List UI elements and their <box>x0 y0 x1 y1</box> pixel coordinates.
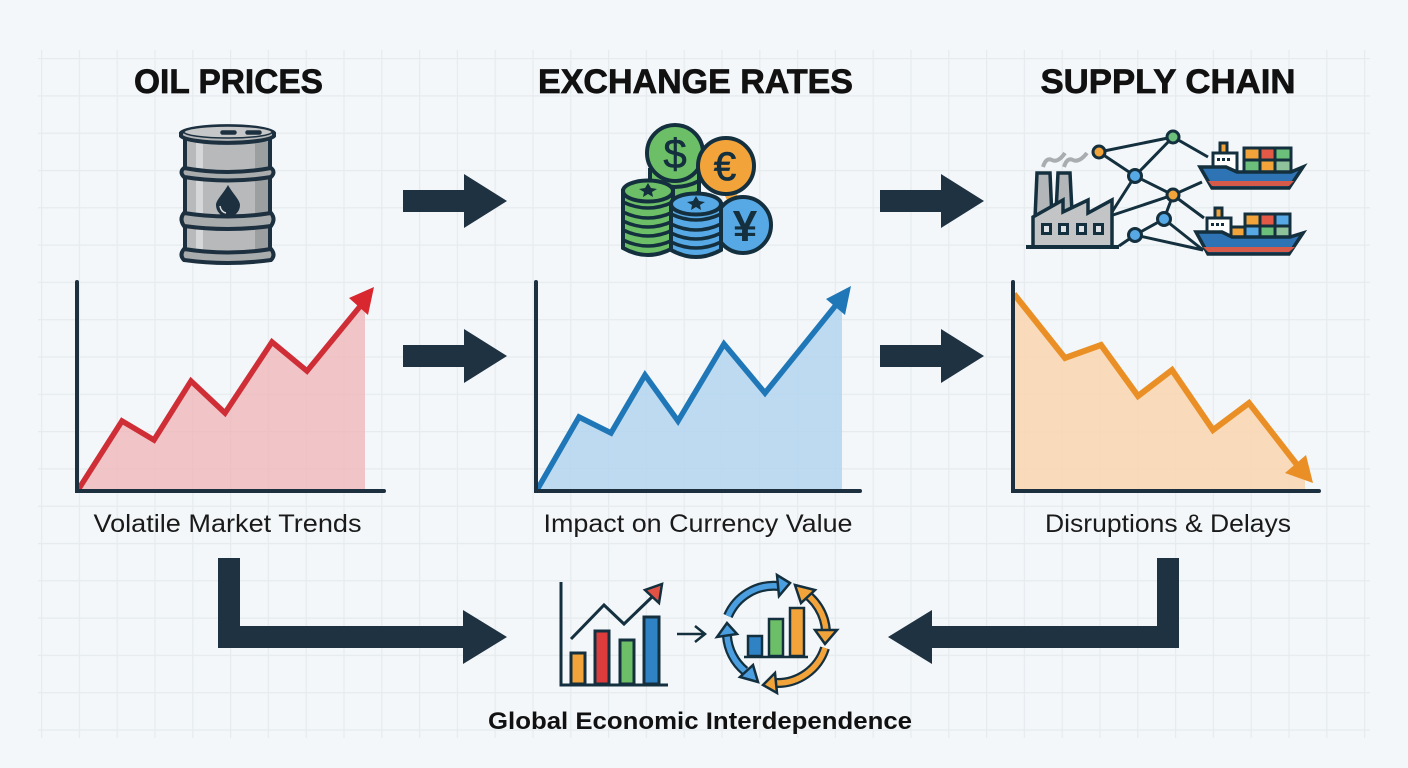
green stack <box>623 180 673 255</box>
icon: currency coins <box>623 125 771 257</box>
caption: volatile market trends: Volatile Market Trends <box>94 510 362 538</box>
blue stack <box>671 194 721 257</box>
network nodes <box>1093 131 1179 242</box>
icon: bar chart with trend <box>561 582 668 685</box>
caption: impact on currency value: Impact on Currency Value <box>544 510 852 538</box>
yen coin <box>715 197 771 253</box>
arc fills <box>727 586 826 683</box>
network links <box>1099 137 1208 250</box>
dollar coin <box>647 125 703 198</box>
euro coin: € <box>714 145 736 189</box>
icon: small arrow <box>677 626 705 642</box>
arc outlines <box>727 586 826 683</box>
arrow: exchange to supply, top <box>880 174 984 228</box>
yen coin: ¥ <box>733 202 758 251</box>
arrow: oil to global <box>218 558 507 664</box>
icon: oil barrel <box>181 126 274 263</box>
euro coin <box>698 138 754 210</box>
title: exchange rates: EXCHANGE RATES <box>538 63 853 101</box>
arrow: supply chain to global <box>888 558 1179 664</box>
dollar coin: $ <box>663 130 687 177</box>
inner bars <box>748 636 762 656</box>
smoke <box>1043 153 1087 167</box>
chart: exchange rate line <box>536 282 860 491</box>
title: oil prices: OIL PRICES <box>134 63 323 101</box>
chart: supply chain line <box>1013 282 1319 491</box>
factory <box>1026 173 1119 247</box>
arrow: exchange to supply, middle <box>880 329 984 383</box>
title: supply chain: SUPPLY CHAIN <box>1040 63 1296 101</box>
arrow heads <box>777 575 790 596</box>
chart: oil price line <box>77 282 384 491</box>
arrow: oil to exchange, top <box>403 174 507 228</box>
icon: cycle of arrows with bars <box>717 575 837 693</box>
caption: disruptions and delays: Disruptions & Delays <box>1045 510 1291 538</box>
caption: global economic interdependence: Global Economic Interdependence <box>488 708 912 735</box>
ship bottom <box>1196 208 1303 254</box>
icon: supply chain network <box>1026 131 1303 254</box>
ship top <box>1200 143 1303 188</box>
arrow: oil to exchange, middle <box>403 329 507 383</box>
